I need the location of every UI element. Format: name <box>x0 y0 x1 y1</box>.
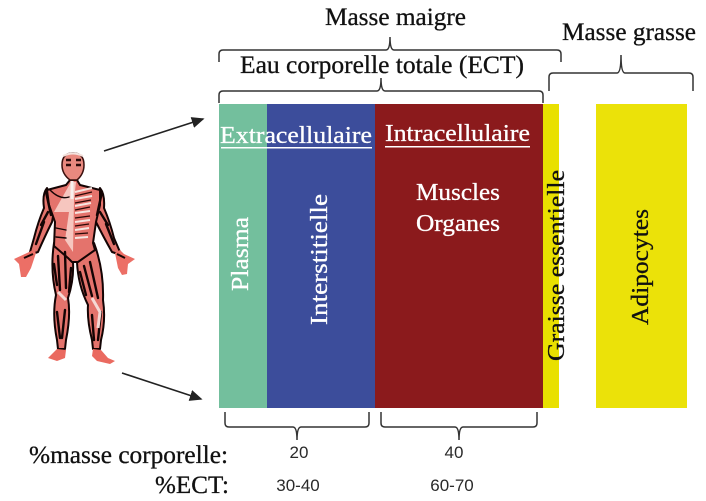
panel: plasma bar <box>219 104 267 408</box>
hands <box>14 250 36 277</box>
right arm <box>93 188 120 254</box>
muscle definition lines <box>36 192 114 244</box>
head <box>62 153 84 180</box>
icon: human muscular figure <box>14 153 135 364</box>
value: 20: 20 <box>290 443 308 462</box>
label: Muscles Organes: Organes <box>416 211 500 237</box>
heading: Masse maigre: Masse maigre <box>325 4 466 31</box>
bracket: Eau corporelle totale <box>219 78 543 103</box>
arrow: to top of bars <box>104 119 203 151</box>
bracket: 40 percent group <box>381 412 537 440</box>
heading: Masse grasse: Masse grasse <box>562 19 696 46</box>
label: Extracellulaire: Extracellulaire <box>220 123 372 149</box>
torso <box>47 180 100 262</box>
label: Adipocytes: Adipocytes <box>628 209 654 325</box>
panel: essential fat bar <box>543 104 559 408</box>
value: 40: 40 <box>445 443 463 462</box>
label: Muscles Organes <box>416 180 500 237</box>
row label: %masse corporelle: %masse corporelle: <box>29 442 228 469</box>
left leg <box>52 243 73 349</box>
heading: Eau corporelle totale: Eau corporelle totale (ECT) <box>240 52 524 79</box>
right leg <box>77 243 104 349</box>
left arm <box>30 188 55 254</box>
label: Graisse essentielle: Graisse essentielle <box>544 170 570 361</box>
sternum and abdomen <box>54 182 76 252</box>
panel: interstitial bar <box>267 104 375 408</box>
value: 30-40: 30-40 <box>276 476 320 495</box>
bracket: 20 percent group <box>225 412 369 440</box>
panel: intracellular bar <box>375 104 543 408</box>
arrow: to bottom of bars <box>122 373 201 399</box>
bracket: Masse grasse <box>549 55 693 91</box>
panel: adipocytes bar <box>596 104 687 408</box>
row label: %ECT: %ECT: <box>155 472 229 499</box>
label: Interstitielle: Interstitielle <box>307 194 333 325</box>
label: Plasma: Plasma <box>228 217 254 291</box>
feet <box>48 349 66 361</box>
label: Muscles Organes: Muscles <box>416 180 500 206</box>
value: 60-70: 60-70 <box>430 476 474 495</box>
bracket: Masse maigre <box>219 37 561 62</box>
label: Intracellulaire: Intracellulaire <box>385 121 530 147</box>
